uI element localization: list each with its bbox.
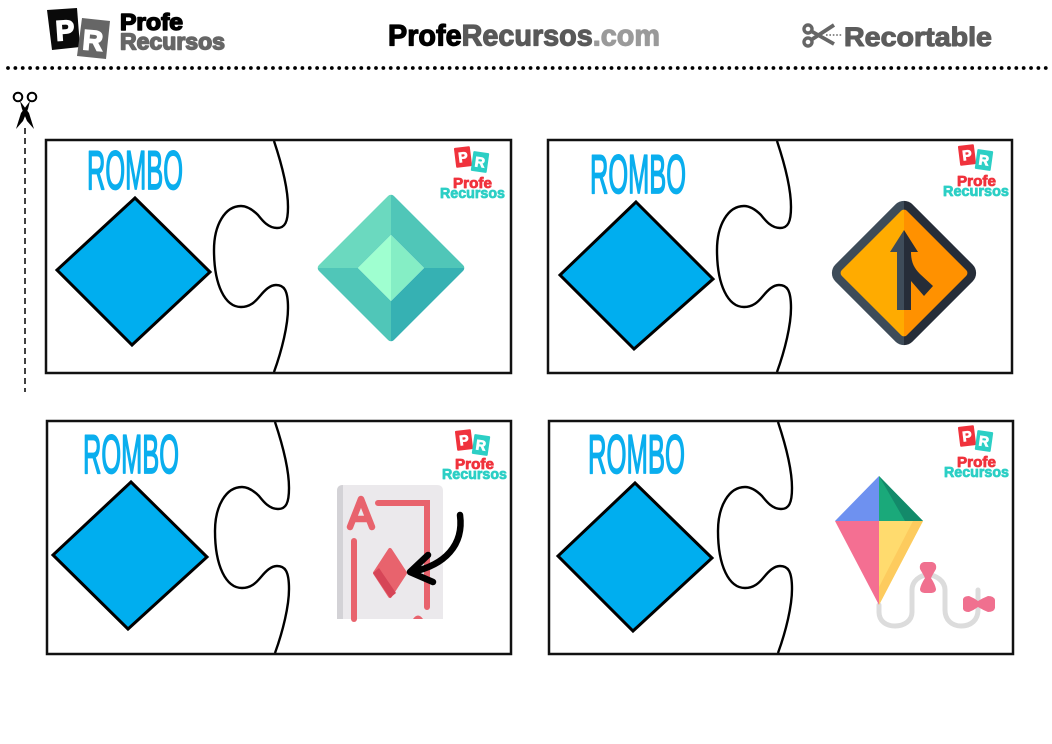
header website title: ProfeRecursos.com — [388, 20, 660, 52]
panel: puzzle card road sign — [548, 140, 1012, 373]
small logo — [943, 144, 1009, 200]
blue rhombus — [558, 483, 712, 631]
small logo: Profe — [453, 175, 492, 192]
header logo: Profe Recursos: Profe — [120, 9, 183, 35]
small logo — [442, 429, 507, 483]
header logo: Profe Recursos: R — [82, 24, 104, 57]
panel: puzzle card gem: ROMBO — [87, 139, 183, 201]
panel: puzzle card kite — [549, 421, 1013, 654]
puzzle cut — [717, 141, 791, 372]
small logo: Profe — [957, 454, 996, 471]
icon: kite — [835, 476, 995, 626]
blue rhombus — [57, 198, 210, 345]
small logo: Recursos — [440, 185, 505, 202]
small logo: P — [961, 146, 973, 164]
small logo: R — [978, 151, 990, 169]
icon: scissors and vertical cut line — [14, 93, 36, 392]
small logo: R — [474, 153, 486, 171]
header logo: Profe Recursos — [47, 8, 225, 59]
puzzle cut — [214, 141, 288, 372]
panel: puzzle card ace of diamonds: ROMBO — [83, 423, 179, 485]
small logo: P — [458, 431, 470, 449]
small logo: P — [457, 148, 469, 166]
small logo: Profe — [957, 173, 996, 190]
icon: gem — [318, 194, 464, 342]
small logo — [944, 425, 1009, 481]
icon: playing card — [337, 485, 443, 619]
small logo: R — [978, 432, 990, 450]
icon: merge road sign — [832, 200, 976, 346]
puzzle cut — [215, 422, 289, 653]
blue rhombus — [560, 202, 713, 349]
small logo: Recursos — [442, 466, 507, 483]
arrow pointing to the diamond — [410, 515, 461, 582]
panel: puzzle card road sign: ROMBO — [590, 143, 686, 205]
small logo: Recursos — [943, 183, 1009, 200]
small logo: R — [475, 436, 487, 454]
header logo: Profe Recursos: P — [55, 14, 75, 47]
small logo: Profe — [455, 456, 494, 473]
blue rhombus — [53, 482, 207, 629]
panel: puzzle card gem — [46, 139, 511, 373]
small logo: Recursos — [944, 464, 1009, 481]
panel: puzzle card ace of diamonds — [47, 421, 511, 654]
header recortable label with scissors: Recortable — [844, 22, 992, 52]
header logo: Profe Recursos: Recursos — [120, 28, 225, 54]
puzzle cut — [718, 422, 792, 653]
small logo — [440, 146, 505, 202]
panel: puzzle card kite: ROMBO — [588, 423, 685, 485]
small logo: P — [961, 427, 973, 445]
